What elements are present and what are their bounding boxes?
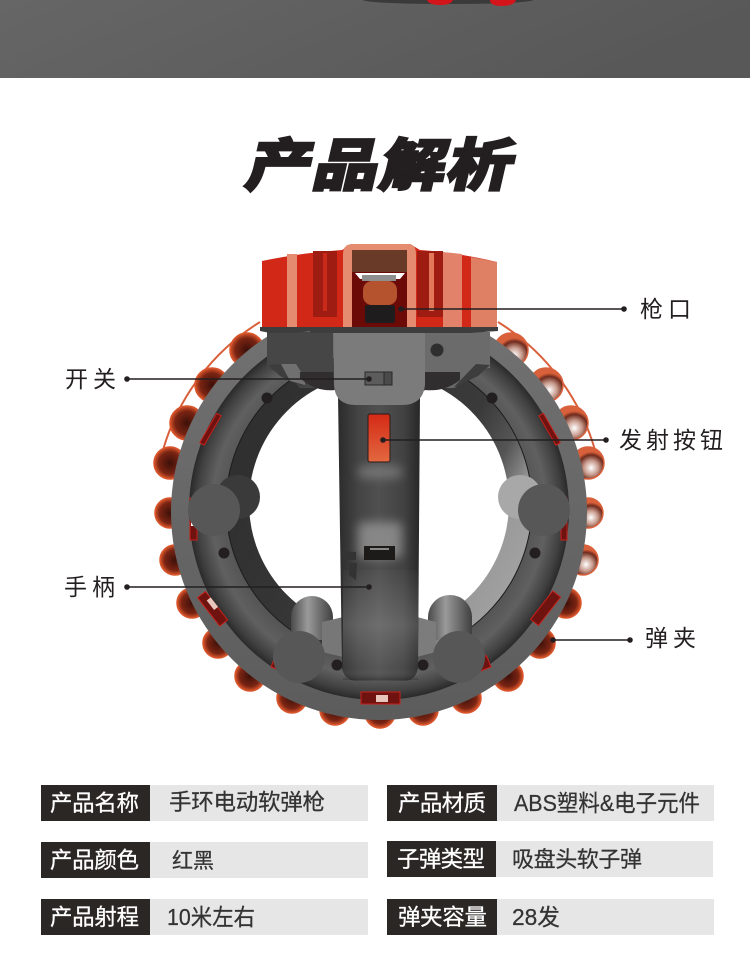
- handle: [338, 395, 420, 681]
- soft darts, left side: [154, 333, 395, 728]
- spec row: 子弹类型: [387, 841, 713, 877]
- magazine lattice: [163, 322, 595, 450]
- spec row: 弹夹容量: 28发: [512, 904, 560, 930]
- spec row: 产品材质: ABS塑料&电子元件: [514, 790, 700, 816]
- rear grip lobes: [216, 475, 542, 657]
- spec row: 产品射程: 10米左右: [167, 904, 255, 930]
- spec row: 子弹类型: 吸盘头软子弹: [512, 847, 642, 872]
- ring slots: [190, 413, 567, 704]
- spec row: 产品材质: [387, 785, 714, 821]
- soft darts, lower right: [408, 588, 581, 725]
- firing button: [368, 414, 390, 462]
- callout: 枪口: [398, 296, 691, 322]
- centre plate: [333, 326, 425, 405]
- upper yoke: [267, 332, 490, 405]
- spec row: 产品名称: 手环电动软弹枪: [169, 790, 325, 815]
- spec row: 子弹类型: 子弹类型: [397, 847, 485, 872]
- spec row: 产品颜色: 产品颜色: [50, 848, 139, 873]
- product: wrist-ring dart blaster: [154, 244, 604, 728]
- screw holes: [218, 392, 540, 670]
- red muzzle housing: [262, 244, 497, 327]
- callout: 开关: [65, 366, 372, 392]
- callout: 发射按钮: 发射按钮: [619, 427, 723, 453]
- slot highlights: [191, 510, 566, 702]
- callout: 枪口: 枪口: [640, 296, 691, 322]
- callout: 手柄: [64, 574, 372, 600]
- soft darts, right side: [494, 333, 604, 575]
- front grip lobes: [188, 484, 570, 683]
- spec row: 产品射程: 产品射程: [50, 905, 139, 930]
- callout: 弹夹: 弹夹: [645, 625, 696, 651]
- handle lower section: [343, 570, 418, 680]
- callout: 手柄: 手柄: [64, 574, 115, 600]
- muzzle base: [260, 327, 498, 333]
- spec row: 产品颜色: 红黑: [172, 850, 214, 873]
- spec row: 产品名称: [41, 785, 368, 821]
- handle soft highlights: [358, 466, 402, 558]
- callout: 开关: 开关: [65, 366, 116, 392]
- spec row: 弹夹容量: [387, 899, 714, 935]
- title: 产品解析: [240, 120, 525, 201]
- inner ring face: [189, 320, 569, 700]
- spec row: 产品名称: 产品名称: [50, 791, 139, 816]
- outer ring: [171, 304, 587, 720]
- callout: 发射按钮: [380, 427, 723, 453]
- callout: 弹夹: [550, 625, 696, 651]
- usb port: [364, 546, 395, 560]
- top banner: [0, 0, 750, 78]
- power switch: [365, 372, 392, 385]
- centre opening: [249, 373, 509, 633]
- spec row: 产品射程: [41, 899, 368, 935]
- spec row: 产品材质: 产品材质: [398, 791, 486, 816]
- side hole: [430, 344, 444, 356]
- spec row: 弹夹容量: 弹夹容量: [398, 905, 487, 930]
- inner dark and light band: [226, 352, 532, 658]
- side latch: [342, 551, 357, 580]
- spec row: 产品颜色: [41, 842, 368, 878]
